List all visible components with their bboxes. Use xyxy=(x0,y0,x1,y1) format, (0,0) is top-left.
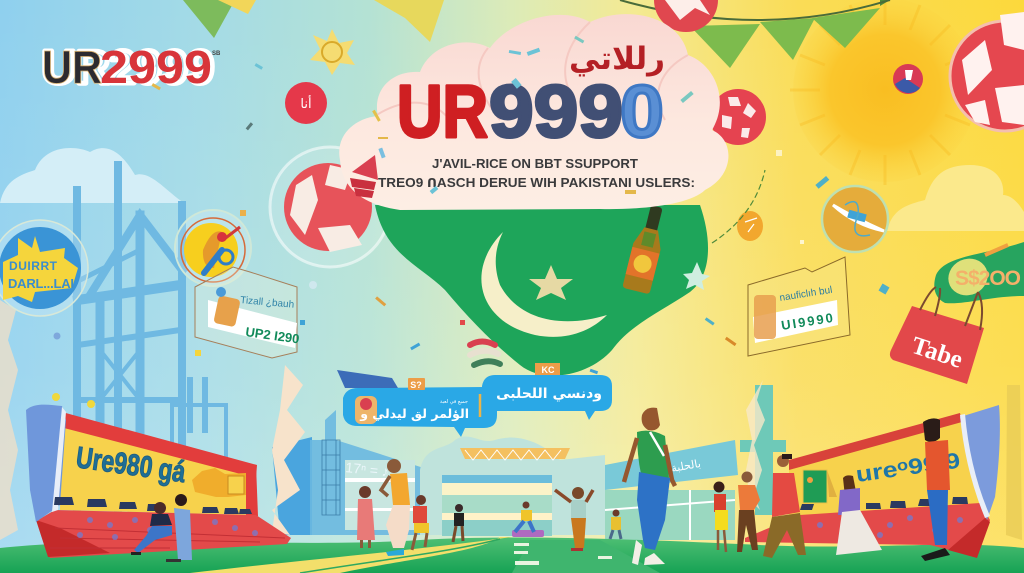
ball: top right large xyxy=(950,12,1024,131)
person: man in red shirt xyxy=(763,454,806,558)
bunting: top centre xyxy=(374,0,444,42)
right bleachers xyxy=(745,405,1000,558)
left cloud xyxy=(0,148,184,203)
person: woman in pink dress xyxy=(357,486,375,548)
speech bubble: left: جميع في لعبة xyxy=(440,399,468,405)
speech bubble: right: ودنسي اللحلبى xyxy=(496,386,602,402)
person: arms-up man xyxy=(555,487,593,551)
bunting: top left xyxy=(183,0,256,38)
green bottle xyxy=(622,203,670,294)
logo: UR2999: 2999 xyxy=(100,41,212,93)
coupon card: right: UI9990 xyxy=(780,310,834,333)
ball: small red: أنا xyxy=(300,95,312,112)
money banner: S$2OO xyxy=(955,267,1021,290)
coupon card: left: Tizall ¿bauh xyxy=(240,295,295,311)
background shops: بالحلبة xyxy=(670,458,702,475)
speech bubble: right xyxy=(482,363,612,420)
person: child in red xyxy=(412,495,429,550)
right cloud xyxy=(887,165,1024,231)
right bleachers: ureᵒ99 9 xyxy=(854,448,962,487)
ground xyxy=(0,530,1024,573)
title cloud xyxy=(339,14,728,210)
coupon card: right: nauficlıh bul xyxy=(779,285,833,304)
shopping bag xyxy=(890,287,984,384)
coupon card: left: UP2 I290 xyxy=(245,324,300,347)
person: tall man in green xyxy=(624,408,675,565)
main heading: UR9990 xyxy=(397,70,664,153)
badge: yellow tools circle xyxy=(175,210,251,286)
left bleachers xyxy=(26,405,291,558)
logo: UR2999: UR xyxy=(42,41,102,93)
speech bubble: left xyxy=(337,370,497,437)
speech bubble: left: الؤلمر لق ليدلي و xyxy=(359,406,469,421)
shopping bag: Tabe xyxy=(908,332,966,374)
person: woman in white skirt xyxy=(836,475,882,555)
subheading text: TREO9 ՈASCH DERUE WIH PAKISTANI USLERS: xyxy=(378,176,695,190)
person: distant dark figure xyxy=(453,504,464,542)
badge: left circle: DUIRRT xyxy=(9,259,58,273)
subheading text xyxy=(378,157,695,190)
badge: left circle xyxy=(0,220,88,316)
badge: right circle xyxy=(822,186,888,252)
subheading text: J'AVIL-RICE ON BBT SSUPPORT xyxy=(432,157,638,171)
speech bubble: right: KC xyxy=(542,365,555,375)
ball: top centre right xyxy=(654,0,718,32)
speech bubble: left: S? xyxy=(410,380,422,390)
pale ribbon column middle xyxy=(272,365,305,535)
main heading: UR9990: 999 xyxy=(489,70,623,153)
person: man in orange top xyxy=(381,459,410,556)
main heading: UR9990: 0 xyxy=(620,70,664,153)
money banner xyxy=(934,242,1024,303)
left bleachers: Ure980 gá xyxy=(74,441,188,489)
sun xyxy=(790,0,985,185)
person: distant yellow runner xyxy=(515,502,534,532)
coupon card: right xyxy=(748,257,850,356)
person: man in orange shirt xyxy=(737,472,760,552)
star badge xyxy=(310,29,355,75)
person: distant yellow figure xyxy=(610,510,621,539)
crescent and star xyxy=(481,232,710,337)
main heading: UR9990: UR xyxy=(397,70,488,153)
rope knot decoration xyxy=(470,342,500,365)
ball: large left with ring xyxy=(270,147,390,267)
dashed arc xyxy=(712,170,765,243)
left tower scaffold xyxy=(77,165,226,545)
person: man in blue xyxy=(166,494,192,562)
logo: UR2999: SB xyxy=(212,51,221,57)
bunting: top right xyxy=(620,0,890,68)
person: man with beard right xyxy=(921,418,950,561)
pakistan flag blob xyxy=(375,205,708,376)
ball: small right dark xyxy=(893,64,923,94)
small orange fruit xyxy=(737,211,763,241)
logo: UR2999: UR2999 xyxy=(42,41,214,93)
person: woman in yellow skirt xyxy=(714,482,728,552)
right side ribbon xyxy=(1006,385,1022,540)
confetti xyxy=(52,36,889,408)
party hat xyxy=(350,155,378,198)
badge: left circle: DARL...LAI xyxy=(8,276,74,291)
coupon card: left xyxy=(195,267,300,358)
ball: small red xyxy=(285,82,327,124)
arabic heading: رللاتي xyxy=(569,41,665,77)
ball: right of cloud xyxy=(710,89,766,145)
pale ribbon column left xyxy=(0,300,18,540)
blue building behind ribbon xyxy=(272,437,312,535)
background shops: 17ⁿ = ♪ xyxy=(345,459,390,480)
background shops xyxy=(310,380,786,540)
person: woman left crouching xyxy=(131,502,172,555)
